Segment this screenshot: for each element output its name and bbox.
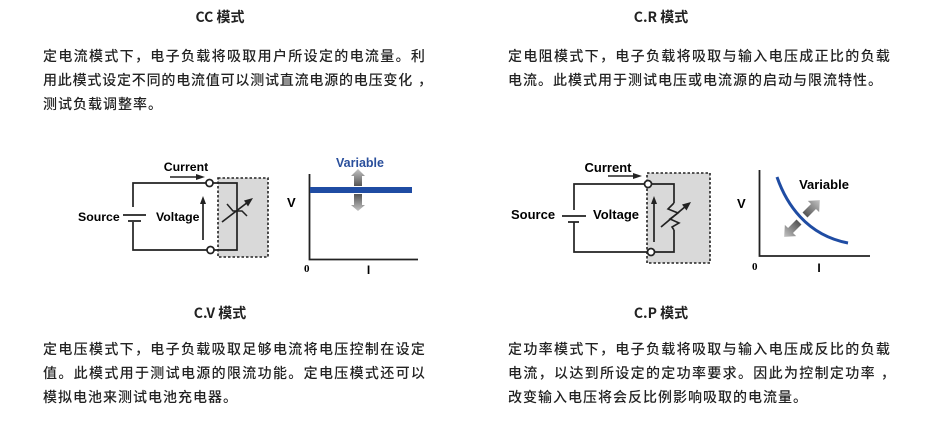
- text: CC mode description: [43, 46, 433, 114]
- text: CC mode description: 定电流模式下，电子负载将吸取用户所设定的电流量。利: [43, 46, 426, 66]
- text: CC mode description: 测试负载调整率。: [43, 94, 163, 114]
- variable load symbol: [222, 198, 253, 222]
- text: CC mode description: 用此模式设定不同的电流值可以测试直流电源的电压变化 ，: [43, 70, 433, 90]
- variable arrows: [351, 169, 365, 211]
- voltage arrow: [200, 196, 206, 240]
- heading: CP mode: C.P 模式: [634, 303, 688, 323]
- text: CP mode description: [508, 339, 896, 407]
- text: CP mode description: 定功率模式下，电子负载将吸取与输入电压成反比的负载: [508, 339, 891, 359]
- labels: Variable: [799, 177, 849, 192]
- text: CV mode description: 值。此模式用于测试电源的限流功能。定电压模式还可以: [43, 363, 426, 383]
- diagram: CC circuit: [78, 160, 268, 257]
- chart: CR VI graph: 0: [752, 261, 758, 273]
- wires: [574, 184, 674, 252]
- text: CP mode description: 改变输入电压将会反比例影响吸取的电流量。: [508, 387, 808, 407]
- chart: CC VI graph: V: [287, 195, 296, 210]
- battery symbol: [123, 215, 146, 221]
- current arrow: [608, 173, 642, 179]
- chart: CR VI graph: I: [817, 261, 821, 275]
- constant line: [310, 187, 412, 193]
- load box: [218, 178, 268, 257]
- terminals: [206, 180, 214, 254]
- current arrow: [170, 174, 205, 180]
- diagram: CR circuit: Source: [511, 207, 555, 222]
- wires: [133, 183, 237, 250]
- text: CV mode description: [43, 339, 426, 407]
- axes: [310, 174, 418, 260]
- chart: CR VI graph: [737, 170, 870, 275]
- chart: CC VI graph: I: [367, 263, 370, 277]
- text: CR mode description: 定电阻模式下，电子负载将吸取与输入电压成正比的负载: [508, 46, 891, 66]
- resistor adjust arrow: [661, 202, 691, 227]
- hyperbola curve: [777, 177, 848, 243]
- text: CR mode description: [508, 46, 891, 90]
- labels: Current: [585, 160, 632, 175]
- diagram: CC circuit: Voltage: [156, 210, 200, 224]
- resistor: [668, 203, 679, 230]
- labels: Variable: [336, 156, 384, 170]
- battery symbol: [562, 216, 586, 222]
- diagram: CR circuit: [511, 160, 710, 263]
- variable arrows: [778, 194, 826, 243]
- load box: [647, 173, 710, 263]
- chart: CC VI graph: 0: [304, 263, 310, 275]
- labels: Current: [164, 160, 208, 174]
- chart: CC VI graph: [287, 156, 418, 277]
- diagram: CR circuit: Voltage: [593, 207, 639, 222]
- heading: CC mode: CC 模式: [196, 7, 244, 27]
- text: CV mode description: 模拟电池来测试电池充电器。: [43, 387, 238, 407]
- heading: CV mode: C.V 模式: [194, 303, 246, 323]
- axes: [760, 170, 870, 256]
- diagram: CC circuit: Source: [78, 210, 120, 224]
- text: CR mode description: 电流。此模式用于测试电压或电流源的启动与限流特性。: [508, 70, 883, 90]
- terminals: [644, 180, 654, 256]
- heading: CR mode: C.R 模式: [634, 7, 688, 27]
- voltage arrow: [651, 196, 657, 242]
- text: CP mode description: 电流，以达到所设定的定功率要求。因此为控制定功率 ，: [508, 363, 896, 383]
- text: CV mode description: 定电压模式下，电子负载吸取足够电流将电压控制在设定: [43, 339, 426, 359]
- chart: CR VI graph: V: [737, 196, 746, 211]
